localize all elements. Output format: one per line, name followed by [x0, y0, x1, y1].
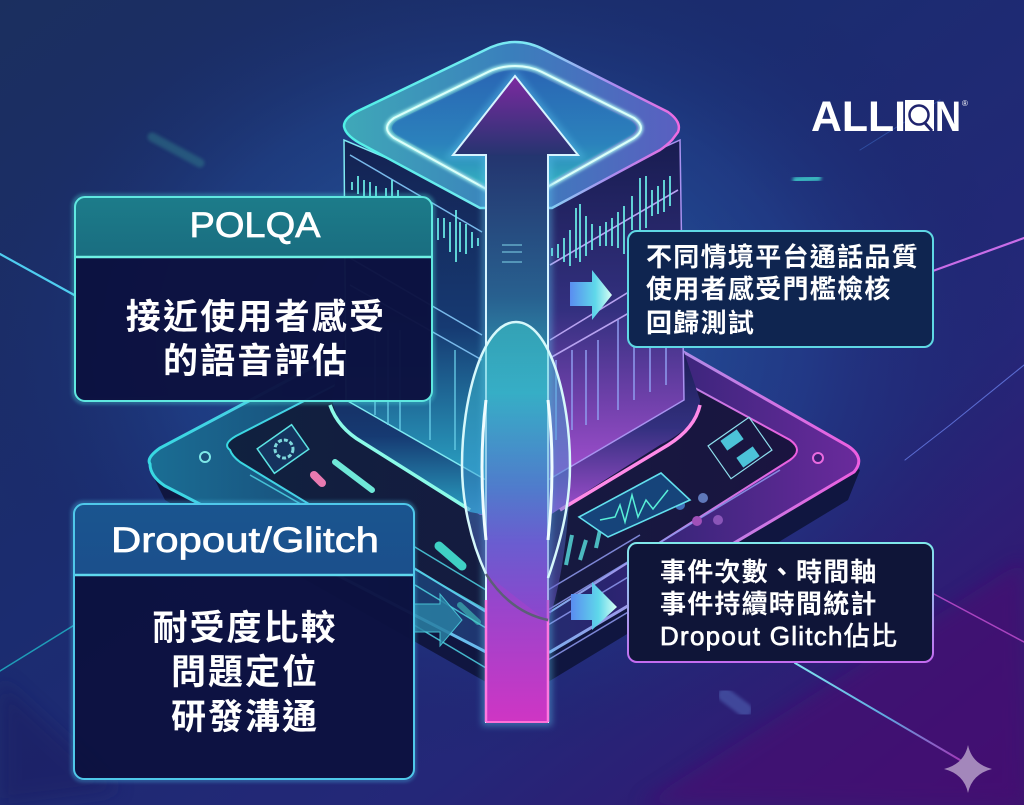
Dropout description: 研發溝通 [171, 698, 319, 737]
panel: top-right callout [628, 231, 933, 347]
bottom-right callout text: Dropout Glitch佔比 [660, 621, 897, 651]
POLQA description: 接近使用者感受 [126, 298, 386, 337]
platform controls [200, 417, 823, 622]
Dropout panel body [75, 575, 413, 779]
logo: ALLION: ® [962, 99, 968, 108]
POLQA heading: POLQA [190, 206, 321, 245]
bottom-right callout text [660, 557, 897, 651]
Dropout description [152, 609, 338, 737]
POLQA description [126, 298, 386, 381]
tower lid [344, 42, 679, 208]
mini monitor with waveform [579, 473, 690, 537]
top-right callout text [646, 242, 919, 338]
panel: Dropout/Glitch [73, 503, 414, 780]
waveforms on tower [352, 176, 670, 266]
logo: ALLION: ALLI [811, 93, 906, 141]
Dropout panel header [75, 504, 413, 575]
Dropout description: 耐受度比較 [152, 609, 338, 648]
arrow to top-right panel [570, 270, 612, 320]
logo: ALLION [811, 93, 968, 141]
POLQA description: 的語音評估 [163, 342, 349, 381]
bottom-right callout text: 事件次數、時間軸 [660, 557, 878, 587]
arrow from Dropout panel [414, 594, 462, 646]
bottom-right callout text: 事件持續時間統計 [660, 589, 878, 619]
panel: bottom-right callout [628, 543, 933, 662]
POLQA panel header [76, 197, 431, 257]
tower body [344, 132, 684, 480]
POLQA panel body [76, 257, 431, 401]
panel: POLQA [74, 196, 433, 402]
logo: ALLION: N [935, 93, 961, 141]
lens loop around arrow [462, 322, 570, 622]
base platform [149, 340, 860, 682]
Dropout heading: Dropout/Glitch [111, 521, 379, 560]
Dropout description: 問題定位 [171, 653, 319, 692]
arrow to bottom-right panel [571, 582, 617, 630]
center up arrow [453, 76, 578, 722]
top-right callout text: 使用者感受門檻檢核 [646, 274, 892, 304]
top-right callout text: 不同情境平台通話品質 [646, 242, 919, 272]
icon: sparkle star [944, 745, 992, 793]
top-right callout text: 回歸測試 [646, 308, 755, 338]
